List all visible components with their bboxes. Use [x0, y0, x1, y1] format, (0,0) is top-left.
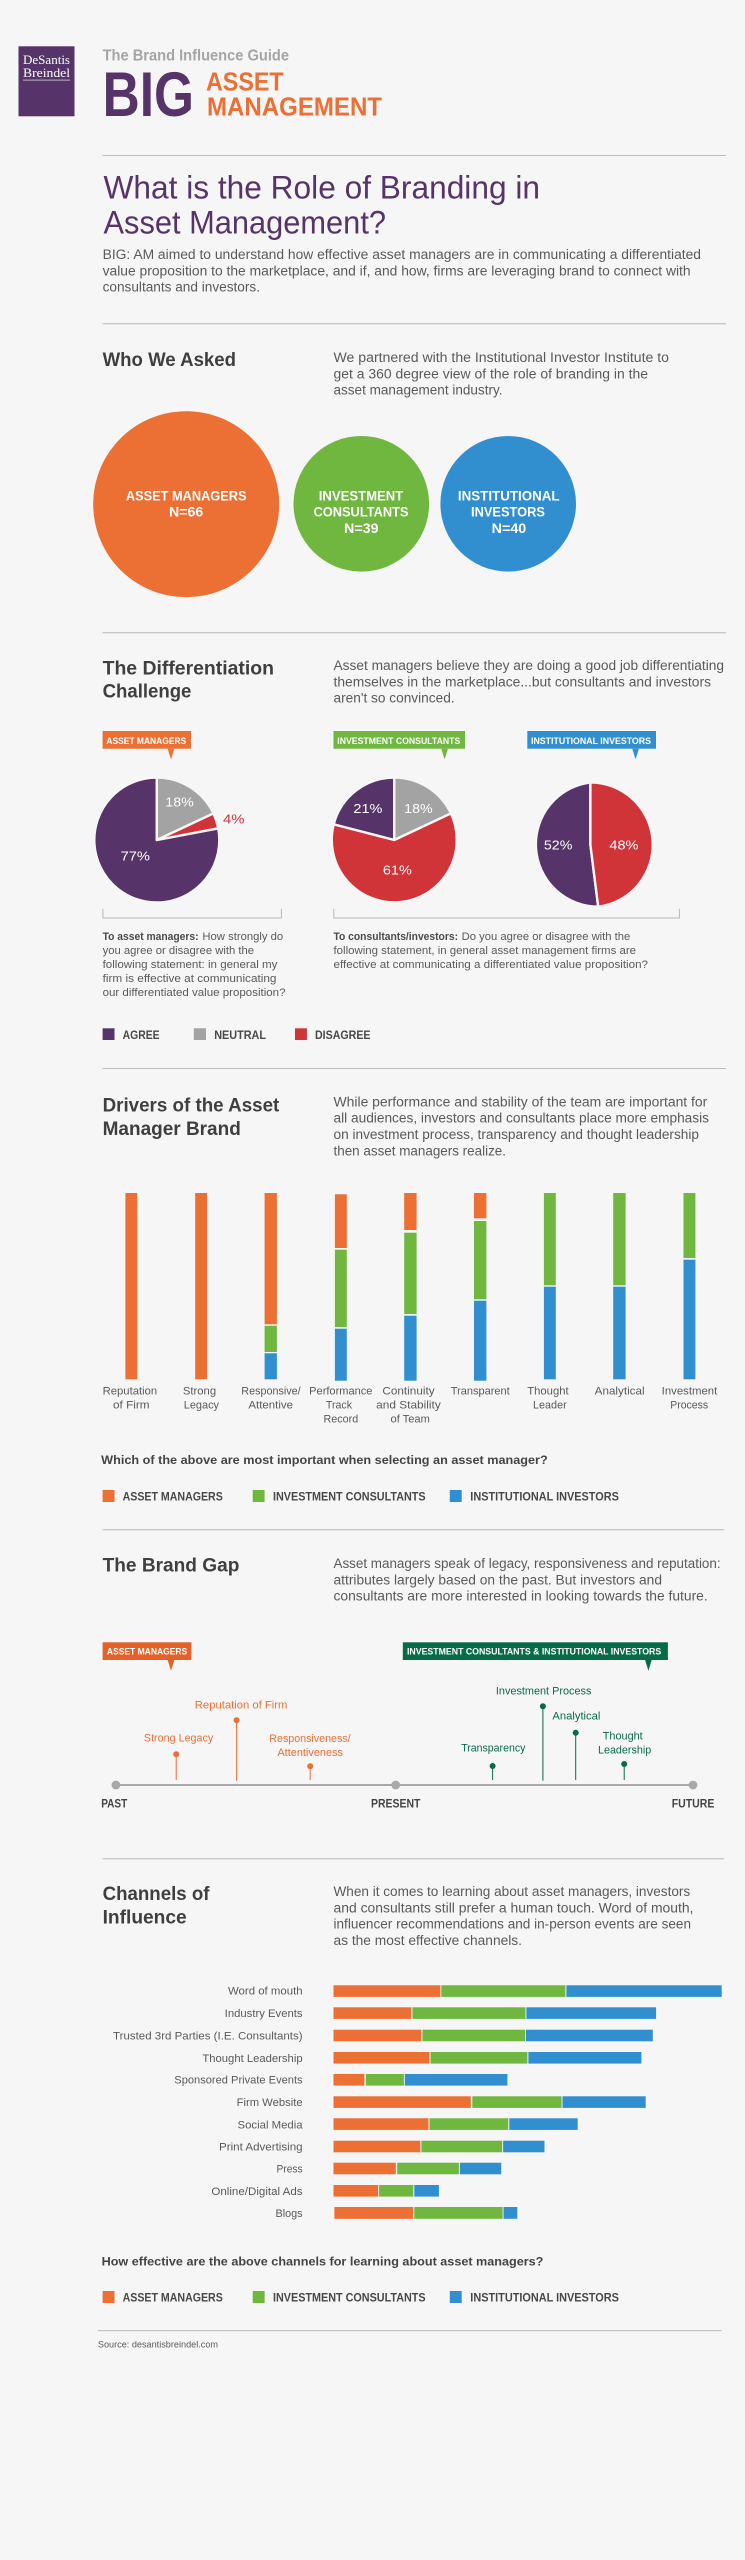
text: consultants and investors question: following statement, in general asset management firms are	[334, 945, 636, 957]
legend: audiences: INSTITUTIONAL INVESTORS	[470, 1490, 619, 1504]
bar labels: Performance	[309, 1386, 372, 1398]
heading: What is the Role of Branding: Asset Management?	[104, 204, 386, 240]
legend: agree, neutral, disagree	[103, 1028, 370, 1042]
circle: institutional investors: N=40	[492, 521, 526, 536]
circle: asset managers: ASSET MANAGERS	[126, 488, 246, 503]
pie chart: asset managers: 4%	[223, 811, 245, 826]
text: channels description: influencer recommendations and in-person events are seen	[334, 1917, 691, 1932]
bar labels: Thought	[527, 1386, 569, 1398]
pie chart: institutional investors: 48%	[609, 837, 639, 852]
marker: responsiveness and attentiveness	[269, 1733, 352, 1780]
bar labels: and Stability	[376, 1400, 441, 1412]
badge: investment consultants and institutional investors: INVESTMENT CONSULTANTS & INSTITUTIONAL INVESTORS	[407, 1647, 661, 1658]
marker: thought leadership	[598, 1730, 651, 1780]
heading: Channels of Influence: Channels of	[103, 1883, 210, 1905]
question: most important drivers: Which of the above are most important when selecting an asset manager?	[101, 1453, 548, 1467]
timeline axis: FUTURE	[672, 1796, 714, 1810]
legend: audiences: INSTITUTIONAL INVESTORS	[470, 2290, 619, 2304]
text: drivers description: all audiences, investors and consultants place more emphasis	[334, 1111, 709, 1126]
bar labels: Process	[670, 1400, 709, 1412]
header title: BIG Asset Management: The Brand Influence Guide	[103, 47, 289, 64]
text: brand gap description	[334, 1556, 721, 1604]
pie chart: investment consultants	[332, 777, 457, 902]
bar labels: Track	[326, 1400, 352, 1412]
circle: institutional investors: INVESTORS	[471, 505, 545, 520]
legend: agree, neutral, disagree: AGREE	[123, 1028, 160, 1042]
bar labels: Responsive/	[241, 1386, 302, 1398]
text: channels description: and consultants still prefer a human touch. Word of mouth,	[334, 1900, 694, 1915]
text: drivers description: then asset managers realize.	[334, 1143, 506, 1158]
text: consultants and investors question: To consultants/investors:	[334, 931, 458, 943]
bar labels: Legacy	[184, 1400, 219, 1412]
text: who we asked description	[334, 350, 669, 398]
bracket: asset managers	[103, 909, 281, 918]
marker: investment process	[496, 1686, 592, 1781]
legend: audiences	[103, 2290, 619, 2304]
bar labels: Reputation	[103, 1386, 157, 1398]
circle: asset managers: N=66	[169, 505, 204, 520]
bar labels: of Firm	[113, 1400, 150, 1412]
header title: BIG Asset Management: MANAGEMENT	[207, 94, 382, 122]
marker: reputation of firm: Reputation of Firm	[195, 1700, 287, 1712]
text: channels description: as the most effective channels.	[334, 1933, 522, 1948]
panel: the brand gap	[101, 1555, 721, 1810]
badge: asset managers	[103, 731, 191, 759]
circle: investment consultants: N=39	[344, 521, 379, 536]
heading: What is the Role of Branding: What is the Role of Branding in	[104, 169, 540, 205]
heading: The Differentiation Challenge: The Differentiation	[103, 657, 274, 679]
circle: investment consultants: CONSULTANTS	[314, 505, 408, 520]
panel: who we asked	[93, 349, 669, 597]
marker: transparency	[461, 1743, 526, 1780]
circle: institutional investors	[440, 436, 576, 572]
text: asset managers question: following statement: in general my	[103, 959, 278, 971]
marker: thought leadership: Thought	[603, 1730, 643, 1742]
marker: transparency: Transparency	[461, 1743, 526, 1755]
channel labels: Firm Website	[237, 2097, 303, 2109]
intro text: BIG: AM aimed to understand how effective asset managers are in communicating a differentiated	[103, 247, 701, 262]
bar labels: Record	[324, 1414, 358, 1426]
channel labels: Online/Digital Ads	[211, 2186, 303, 2198]
heading: What is the Role of Branding	[104, 169, 540, 240]
pie chart: institutional investors	[536, 782, 653, 907]
badge: investment consultants	[334, 731, 465, 759]
channel labels: Trusted 3rd Parties (I.E. Consultants)	[113, 2030, 303, 2042]
channel labels: Thought Leadership	[202, 2053, 303, 2065]
text: asset managers question: firm is effective at communicating	[103, 973, 276, 985]
pie chart: investment consultants: 18%	[404, 801, 433, 816]
marker: analytical	[552, 1710, 600, 1780]
legend: audiences: INVESTMENT CONSULTANTS	[273, 1490, 426, 1504]
text: consultants and investors question	[334, 931, 648, 971]
text: drivers description: on investment process, transparency and thought leadership	[334, 1127, 699, 1142]
intro text: consultants and investors.	[103, 280, 260, 295]
bar labels: Strong	[183, 1386, 216, 1398]
stacked bar chart: channels	[334, 1985, 722, 2219]
text: channels description: When it comes to learning about asset managers, investors	[334, 1884, 690, 1899]
timeline axis: PRESENT	[371, 1796, 421, 1810]
text: consultants and investors question: effective at communicating a differentiated value proposition?	[334, 959, 648, 971]
channel labels: Blogs	[276, 2208, 303, 2220]
heading: Drivers of the Asset Manager Brand: Drivers of the Asset	[103, 1095, 280, 1117]
text: asset managers question: How strongly do	[202, 931, 283, 943]
header title: BIG Asset Management: BIG	[103, 60, 194, 130]
intro text: value proposition to the marketplace, and if, and how, firms are leveraging brand to connect with	[103, 263, 691, 278]
text: brand gap description: attributes largely based on the past. But investors and	[334, 1572, 662, 1587]
stacked bar chart: drivers	[125, 1193, 695, 1381]
pie chart: investment consultants: 21%	[353, 801, 383, 816]
heading: The Differentiation Challenge: Challenge	[103, 681, 191, 703]
marker: thought leadership: Leadership	[598, 1744, 651, 1756]
marker: responsiveness and attentiveness: Responsiveness/	[269, 1733, 352, 1745]
marker: investment process: Investment Process	[496, 1686, 592, 1698]
text: who we asked description: get a 360 degree view of the role of branding in the	[334, 366, 648, 381]
pie chart: institutional investors: 52%	[544, 837, 573, 852]
channel labels: Sponsored Private Events	[174, 2075, 303, 2087]
badge: institutional investors	[527, 731, 656, 759]
circle: investment consultants	[294, 436, 429, 572]
panel: drivers of the asset manager brand	[101, 1094, 717, 1504]
bar labels: Attentive	[248, 1400, 293, 1412]
badge: institutional investors: INSTITUTIONAL INVESTORS	[531, 736, 651, 747]
text: who we asked description: asset management industry.	[334, 383, 502, 398]
badge: asset managers: ASSET MANAGERS	[107, 1647, 187, 1658]
text: drivers description: While performance and stability of the team are important for	[334, 1094, 708, 1109]
source note: Source: desantisbreindel.com	[98, 2339, 218, 2350]
intro text	[103, 247, 701, 295]
heading: The Differentiation Challenge	[103, 657, 274, 703]
text: channels description	[334, 1884, 694, 1948]
badge: asset managers: ASSET MANAGERS	[106, 736, 186, 747]
logo: DeSantis Breindel: Breindel	[23, 66, 71, 80]
pie chart: asset managers: 77%	[121, 849, 150, 864]
heading: Drivers of the Asset Manager Brand	[103, 1095, 280, 1140]
bar labels: Analytical	[595, 1386, 645, 1398]
text: drivers description	[334, 1094, 709, 1158]
text: brand gap description: consultants are more interested in looking towards the future.	[334, 1589, 708, 1604]
pie chart: investment consultants: 61%	[383, 862, 412, 877]
timeline axis	[101, 1781, 714, 1810]
marker: responsiveness and attentiveness: Attentiveness	[277, 1747, 343, 1759]
panel: channels of influence	[102, 1883, 722, 2304]
text: who we asked description: We partnered with the Institutional Investor Institute to	[334, 350, 669, 365]
panel: the differentiation challenge	[94, 657, 724, 1042]
bar labels: Investment	[662, 1386, 717, 1398]
pie chart: asset managers	[94, 778, 245, 902]
bar labels: Continuity	[382, 1386, 435, 1398]
badge: investment consultants and institutional investors	[403, 1642, 668, 1671]
text: asset managers question	[103, 931, 285, 999]
text: differentiation description: themselves in the marketplace...but consultants and investors	[334, 674, 711, 689]
heading: Channels of Influence: Influence	[103, 1906, 187, 1928]
bar labels	[103, 1386, 717, 1426]
text: consultants and investors question: Do you agree or disagree with the	[462, 931, 630, 943]
circle: institutional investors: INSTITUTIONAL	[458, 488, 560, 503]
circle: investment consultants: INVESTMENT	[319, 488, 404, 503]
marker: strong legacy	[144, 1732, 214, 1780]
header title: BIG Asset Management	[103, 47, 382, 130]
header title: BIG Asset Management: ASSET	[206, 68, 284, 96]
marker: reputation of firm	[195, 1700, 287, 1781]
heading: Drivers of the Asset Manager Brand: Manager Brand	[103, 1118, 241, 1140]
channel labels: Press	[276, 2164, 303, 2176]
text: asset managers question: To asset managers:	[103, 931, 199, 943]
badge: asset managers	[103, 1642, 191, 1671]
logo: DeSantis Breindel	[18, 46, 74, 116]
legend: audiences	[103, 1490, 619, 1504]
legend: audiences: INVESTMENT CONSULTANTS	[273, 2290, 426, 2304]
circle: asset managers	[93, 411, 279, 597]
legend: agree, neutral, disagree: NEUTRAL	[214, 1028, 266, 1042]
legend: audiences: ASSET MANAGERS	[123, 2290, 223, 2304]
question: channel effectiveness: How effective are the above channels for learning about asset managers?	[102, 2254, 543, 2268]
logo: DeSantis Breindel: DeSantis	[23, 53, 70, 67]
text: differentiation description: Asset managers believe they are doing a good job differentiating	[334, 658, 724, 673]
text: asset managers question: you agree or disagree with the	[103, 945, 254, 957]
text: asset managers question: our differentiated value proposition?	[103, 987, 285, 999]
channel labels: Word of mouth	[228, 1986, 303, 1998]
text: differentiation description	[334, 658, 724, 706]
text: brand gap description: Asset managers speak of legacy, responsiveness and reputation:	[334, 1556, 721, 1571]
bar labels: Leader	[533, 1400, 567, 1412]
channel labels: Print Advertising	[219, 2141, 303, 2153]
channel labels: Industry Events	[225, 2008, 303, 2020]
legend: audiences: ASSET MANAGERS	[123, 1490, 223, 1504]
heading: The Brand Gap: The Brand Gap	[103, 1555, 239, 1577]
marker: analytical: Analytical	[552, 1710, 600, 1722]
legend: agree, neutral, disagree: DISAGREE	[315, 1028, 370, 1042]
timeline axis: PAST	[101, 1796, 128, 1810]
heading: Channels of Influence	[103, 1883, 210, 1928]
bar labels: of Team	[390, 1414, 430, 1426]
badge: investment consultants: INVESTMENT CONSULTANTS	[337, 736, 460, 747]
bracket: consultants and investors	[334, 909, 679, 918]
pie chart: asset managers: 18%	[165, 795, 194, 810]
channel labels: Social Media	[238, 2119, 304, 2131]
text: differentiation description: aren't so convinced.	[334, 691, 455, 706]
heading: Who We Asked: Who We Asked	[103, 349, 236, 371]
channel labels	[113, 1986, 304, 2220]
bar labels: Transparent	[451, 1386, 510, 1398]
marker: strong legacy: Strong Legacy	[144, 1732, 214, 1744]
